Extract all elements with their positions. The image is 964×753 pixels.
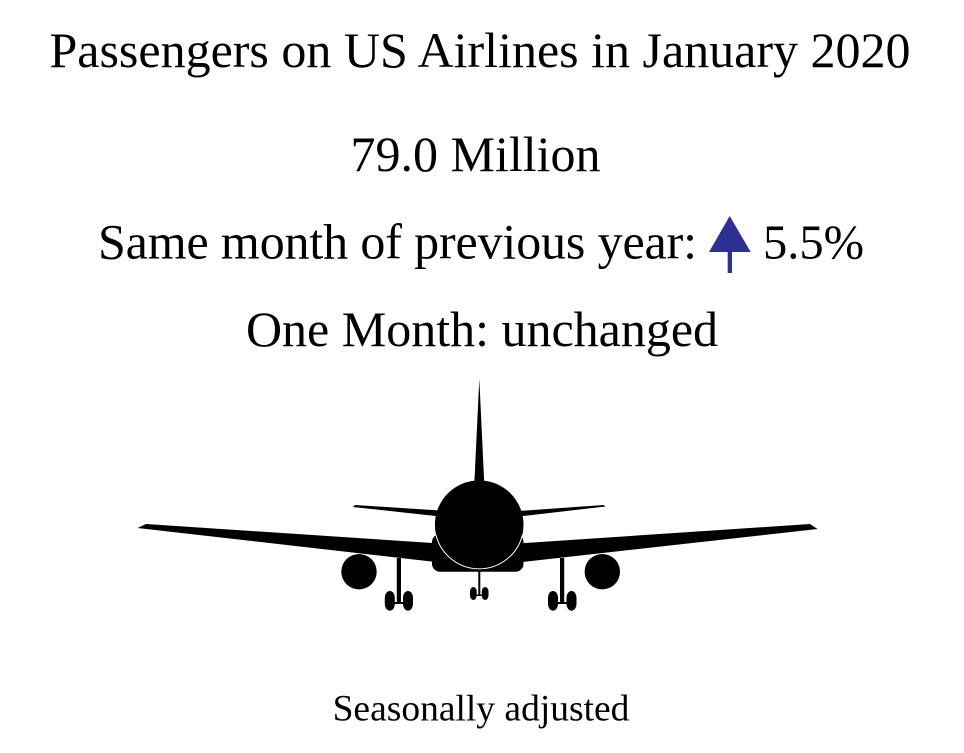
right wing: [518, 524, 818, 562]
fuselage: [435, 480, 524, 569]
year-over-year label: Same month of previous year:: [98, 214, 697, 270]
footnote: Seasonally adjusted: [333, 688, 630, 730]
right tailplane: [519, 505, 606, 516]
left main landing gear: [385, 558, 413, 611]
left wing: [138, 524, 440, 562]
tail fin: [474, 379, 484, 484]
left engine: [341, 554, 377, 589]
icon: up arrow: [709, 216, 751, 273]
right main landing gear: [548, 558, 576, 611]
month-over-month comparison: One Month: unchanged: [246, 301, 718, 357]
fuselage lower highlight: [436, 535, 522, 569]
belly fairing: [432, 534, 524, 572]
icon: airplane front view: [138, 379, 818, 611]
year-over-year value: 5.5%: [763, 216, 864, 270]
year-over-year comparison: [98, 214, 864, 273]
nose landing gear: [470, 570, 488, 600]
right engine: [585, 554, 620, 589]
left tailplane: [353, 505, 440, 516]
title: Passengers on US Airlines in January 2020: [49, 22, 911, 78]
passenger total: 79.0 Million: [350, 126, 601, 182]
